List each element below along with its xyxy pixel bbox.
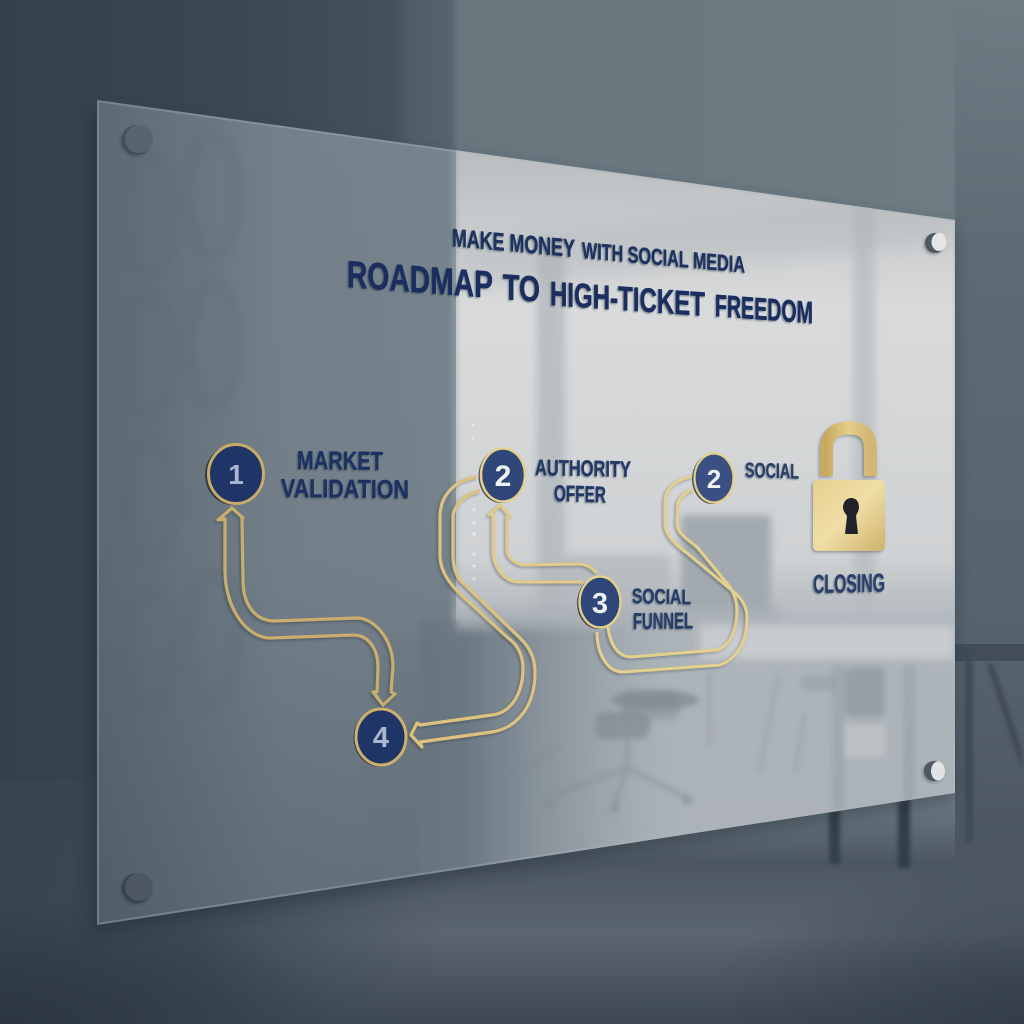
- label: social funnel: FUNNEL: [633, 607, 693, 634]
- arrow: 4 to 1: [218, 508, 395, 705]
- label: market validation: [281, 445, 409, 504]
- main title: FREEDOM: [715, 288, 813, 330]
- step 1 badge: 1: [228, 459, 244, 490]
- step 2 badge: social: [692, 454, 734, 504]
- subtitle: WITH SOCIAL MEDIA: [582, 237, 745, 278]
- label: social funnel: SOCIAL: [632, 585, 691, 609]
- subtitle: [452, 224, 745, 278]
- step 2 badge: social: 2: [707, 464, 721, 494]
- step 2 badge: authority offer: 2: [495, 460, 511, 493]
- label: authority offer: OFFER: [554, 480, 606, 508]
- step 3 badge: 3: [592, 588, 608, 620]
- screw: bottom left: [122, 873, 153, 903]
- main title: [347, 254, 813, 330]
- main title: TO: [503, 266, 540, 310]
- arrow: social funnel to social: [597, 476, 747, 672]
- main title: HIGH-TICKET: [550, 275, 705, 324]
- label: authority offer: [535, 455, 631, 508]
- step 3 badge: [577, 576, 620, 629]
- label: market validation: MARKET: [297, 445, 383, 476]
- main title: ROADMAP: [347, 254, 493, 307]
- panel shadow: [90, 106, 955, 934]
- screw: top right: [925, 233, 946, 253]
- blurred monitor and desk reflection: [456, 515, 955, 659]
- step 2 badge: authority offer: [478, 448, 525, 503]
- icon: gold padlock: [813, 428, 885, 551]
- step 1 badge: [205, 444, 264, 505]
- label: authority offer: AUTHORITY: [535, 455, 631, 482]
- glass panel: [97, 100, 955, 940]
- blurred chairs reflection: [595, 666, 914, 812]
- dotted reflection lights: [472, 424, 476, 581]
- subtitle: MAKE MONEY: [452, 224, 575, 263]
- arrow: 3 to 2: [489, 505, 597, 582]
- label: social funnel: [632, 585, 693, 634]
- arrow: 2 to 4: [411, 477, 535, 747]
- step 4 badge: 4: [373, 722, 389, 754]
- ghost reflection shapes: [124, 133, 236, 710]
- label: market validation: VALIDATION: [281, 473, 409, 504]
- step 4 badge: [354, 709, 406, 766]
- panel edge highlight: [97, 100, 955, 925]
- screw: top left: [122, 125, 153, 155]
- label: social: SOCIAL: [745, 459, 799, 484]
- screw: bottom right: [924, 761, 945, 781]
- label: closing: CLOSING: [813, 568, 885, 599]
